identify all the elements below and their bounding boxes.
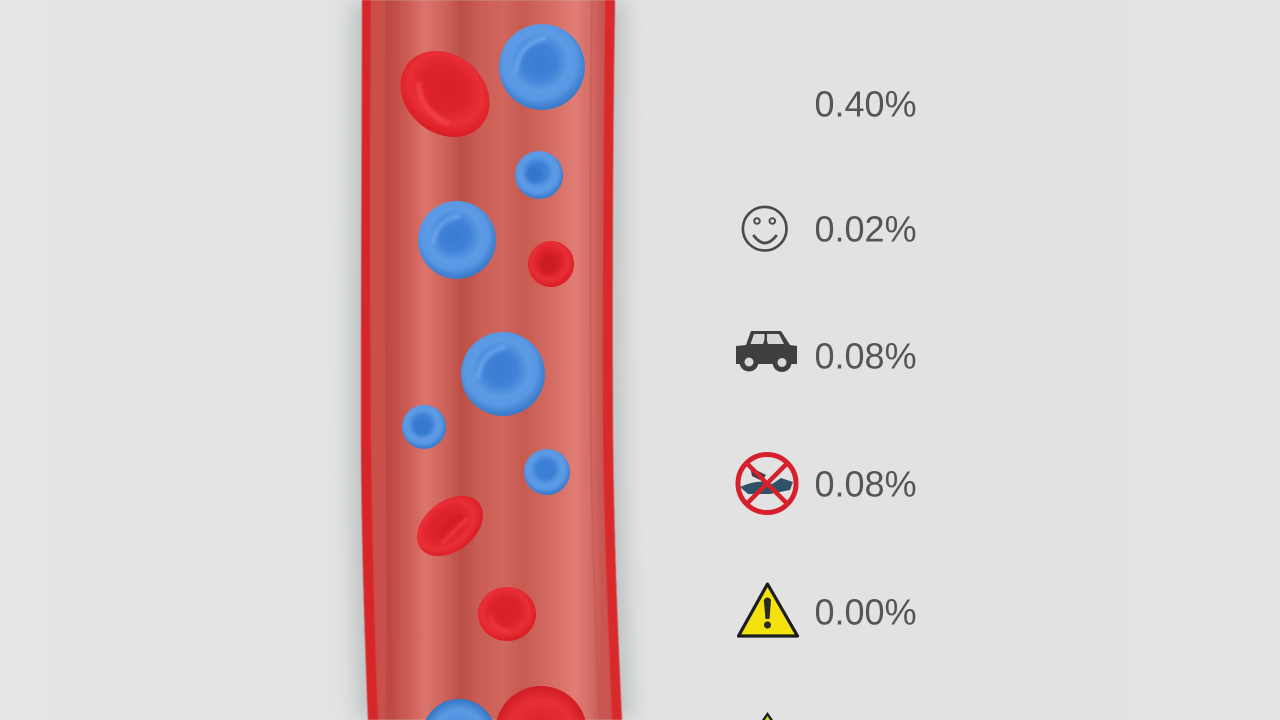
- icon: car: [736, 331, 797, 372]
- icon: second warning triangle: [762, 712, 773, 720]
- red cell bottom: [497, 686, 585, 720]
- blue cell 1: [499, 24, 585, 110]
- value 0.02%: 0.02%: [814, 208, 917, 250]
- blue cell bottom: [426, 699, 492, 720]
- red cell angled: [405, 484, 495, 568]
- red cell large top: [383, 33, 507, 155]
- row: car 0.08%: [736, 331, 917, 376]
- vessel inner right line: [590, 0, 600, 720]
- blue cell 5: [402, 405, 446, 449]
- blood vessel: [361, 0, 622, 720]
- blue cell 6: [524, 449, 570, 495]
- value 0.40%: 0.40%: [814, 84, 917, 124]
- red cell lower: [478, 587, 536, 641]
- vessel inner left line: [385, 0, 393, 720]
- value 0.08%: 0.08%: [814, 464, 917, 504]
- value 0.08%: 0.08%: [814, 336, 917, 376]
- row: warning 0.00%: [738, 584, 917, 636]
- vessel lumen: [361, 0, 622, 720]
- icon: warning triangle: [738, 584, 798, 636]
- red cell small: [528, 241, 574, 287]
- icon: prohibited plane: [738, 454, 796, 512]
- vessel right wall: [603, 0, 622, 720]
- vessel left wall: [361, 0, 378, 720]
- blue cell 3: [418, 201, 496, 279]
- icon: smiley: [743, 207, 786, 250]
- vessel shadow: [351, 0, 632, 720]
- row: smiley 0.02%: [743, 207, 917, 250]
- row: no-flying 0.08%: [738, 454, 917, 512]
- blue cell 4: [461, 332, 545, 416]
- blue cell 2: [515, 151, 563, 199]
- value 0.00%: 0.00%: [814, 592, 917, 632]
